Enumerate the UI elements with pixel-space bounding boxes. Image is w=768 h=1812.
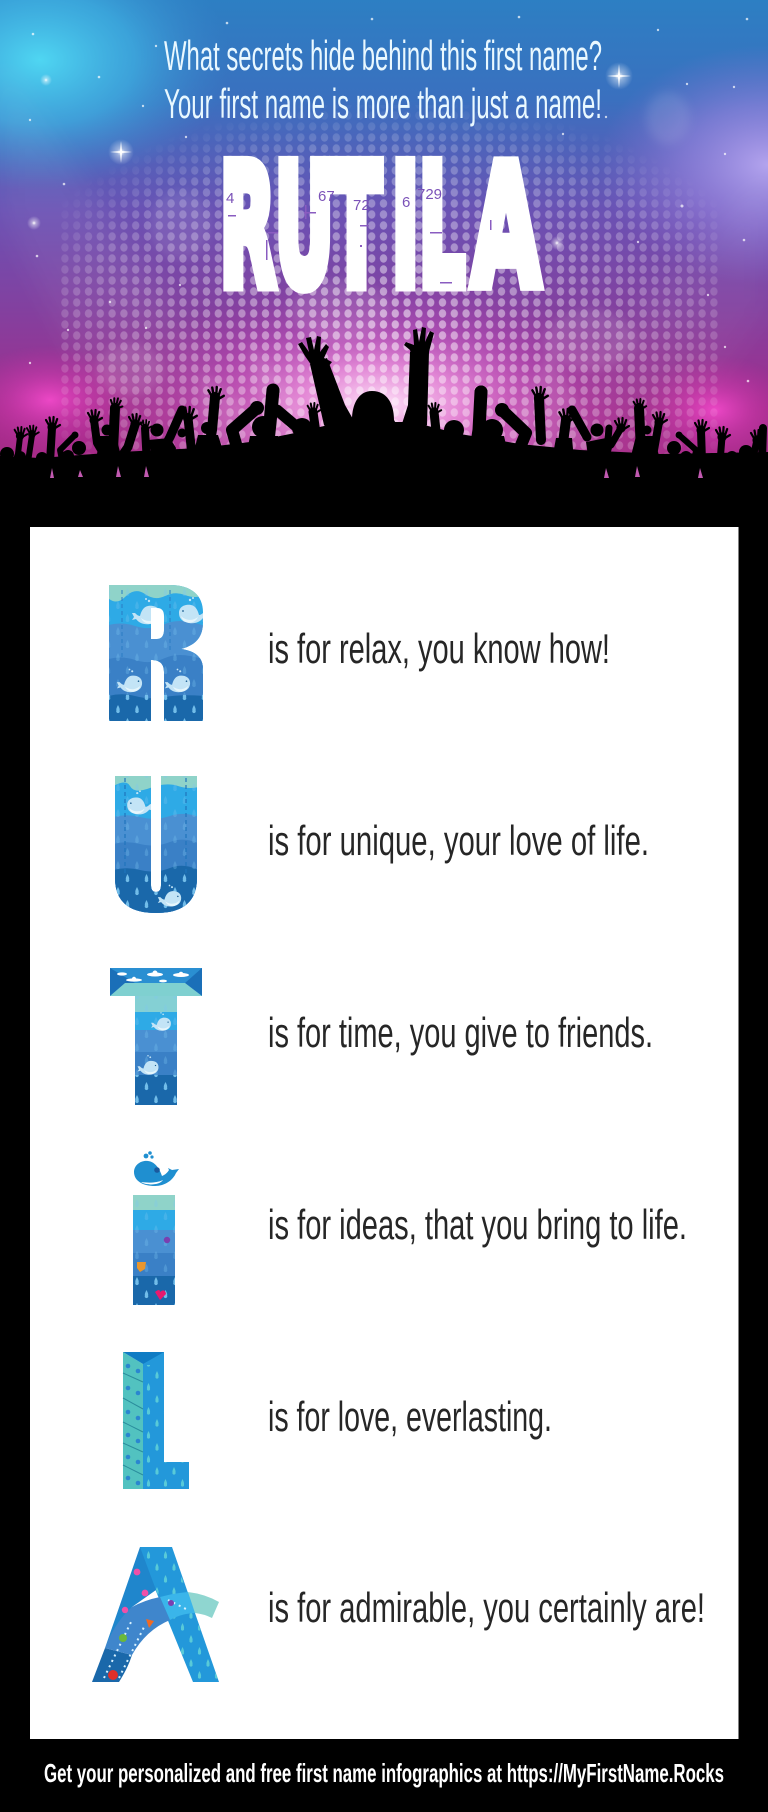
title: RUTILA: RUTIL xyxy=(220,131,465,324)
icon: blue whale xyxy=(134,1151,179,1186)
letter icon: A xyxy=(92,1547,219,1682)
text: R line: is for relax, you know how! xyxy=(268,625,610,672)
stars and sparkles xyxy=(27,16,749,382)
letter icon: T xyxy=(110,968,202,1110)
title: RUTILA: 6 xyxy=(402,194,410,211)
letter icon: U xyxy=(115,776,197,913)
title: RUTILA: 67 xyxy=(318,188,335,205)
crowd silhouette xyxy=(0,327,768,530)
title: RUTILA: 729 xyxy=(417,186,442,203)
panel: header concert background xyxy=(0,0,768,458)
letter icon: L xyxy=(123,1352,189,1489)
title: RUTILA: 4 xyxy=(226,190,234,207)
letter icon: I with whale xyxy=(133,1151,179,1305)
title: RUTILA: 72 xyxy=(353,197,370,214)
letter icon: R xyxy=(109,585,203,721)
text: L line: is for love, everlasting. xyxy=(268,1393,552,1440)
panel: white letter list xyxy=(30,527,738,1739)
title: RUTILA: A xyxy=(472,132,540,324)
